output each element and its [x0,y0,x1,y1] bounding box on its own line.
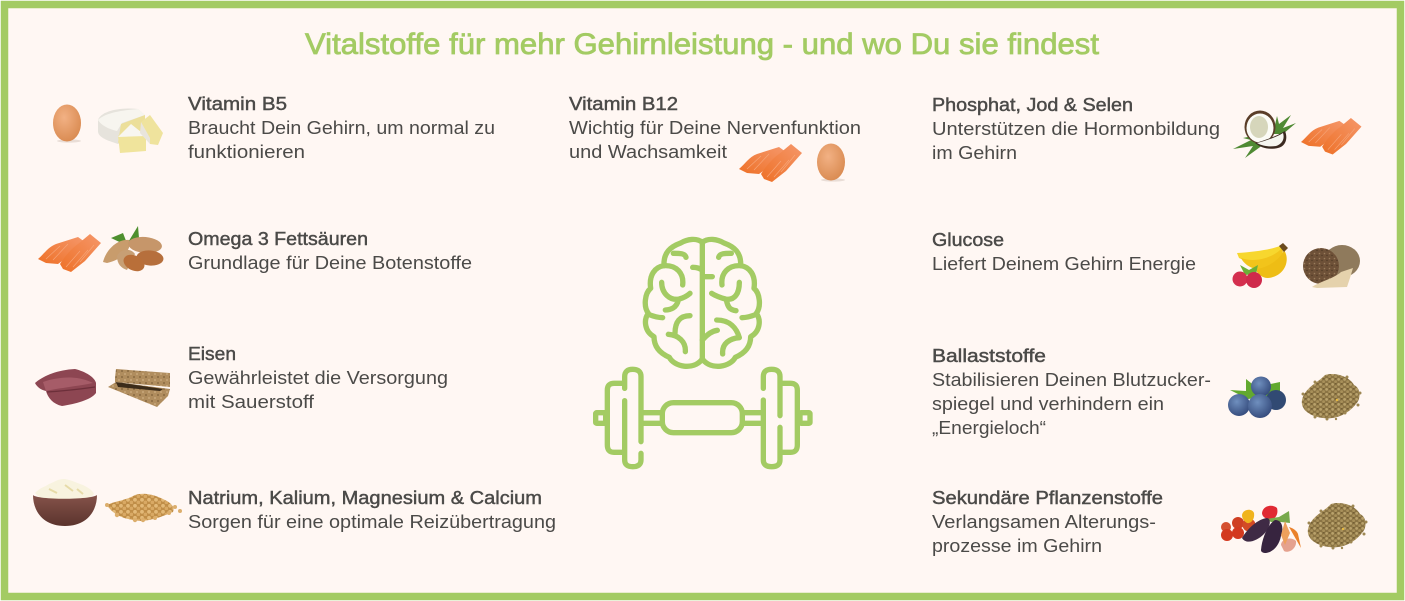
block: Vitamin B12 [569,93,861,182]
text: Glucose: Liefert Deinem Gehirn Energie [932,253,1196,274]
text: Vitamin B12: Wichtig für Deine Nervenfunktion [569,117,861,138]
icon: lentils [1308,503,1368,550]
icon: salmon [38,234,101,272]
text: Phosphat, Jod & Selen: Unterstützen die Hormonbildung [932,118,1220,139]
icon: chickpeas [105,494,182,522]
icon: bread [1303,245,1360,288]
icon: vegetables [1221,506,1301,553]
central icon: brain and dumbbell [596,239,810,467]
text: Phosphat, Jod & Selen [932,94,1220,163]
text: Eisen: Eisen [188,343,236,364]
text: Omega 3 Fettsäuren: Omega 3 Fettsäuren [188,228,368,249]
title: Vitalstoffe für mehr Gehirnleistung - und wo Du sie findest [305,28,1100,61]
text: Sekundäre Pflanzenstoffe [932,487,1163,556]
icon: banana and raspberries [1232,243,1288,288]
text: Vitamin B12: Vitamin B12 [569,93,678,114]
block: Eisen [35,343,448,412]
text: Vitamin B5: Braucht Dein Gehirn, um normal zu [188,117,495,138]
icon: cheese [98,108,163,153]
icon: brain [645,239,759,366]
text: Phosphat, Jod & Selen: Phosphat, Jod & Selen [932,94,1133,115]
text: Sekundäre Pflanzenstoffe: Sekundäre Pflanzenstoffe [932,487,1163,508]
block: Omega 3 Fettsäuren [38,226,472,274]
icon: egg [817,144,845,182]
text: Vitamin B5 [188,93,495,162]
icon: coconut [1233,110,1296,158]
text: Ballaststoffe: Stabilisieren Deinen Blutzucker- [932,369,1211,390]
block: Natrium, Kalium, Magnesium & Calcium [33,479,556,532]
text: Ballaststoffe [932,345,1211,438]
icon: lentils [1302,374,1362,420]
text: Eisen: Gewährleistet die Versorgung [188,367,448,388]
icon: salmon [1301,118,1361,154]
text: Ballaststoffe: „Energieloch“ [932,417,1046,438]
icon: salmon [739,144,802,182]
icon: almonds [103,226,164,274]
text: Phosphat, Jod & Selen: im Gehirn [932,142,1017,163]
icon: blueberries [1228,376,1286,418]
text: Natrium, Kalium, Magnesium & Calcium: Natrium, Kalium, Magnesium & Calcium [188,487,542,508]
block: Glucose [932,229,1360,288]
icon: egg [53,104,81,143]
text: Vitamin B5: Vitamin B5 [188,93,287,114]
icon: crispbread [108,369,170,407]
text: Glucose: Glucose [932,229,1004,250]
text: Vitamin B5: funktionieren [188,141,305,162]
text: Ballaststoffe: Ballaststoffe [932,345,1046,366]
text: Ballaststoffe: spiegel und verhindern ein [932,393,1164,414]
text: Vitamin B12: und Wachsamkeit [569,141,727,162]
text: Glucose [932,229,1196,274]
block: Vitamin B5 [53,93,495,162]
text: Vitamin B12 [569,93,861,162]
block: Ballaststoffe [932,345,1362,438]
text: Natrium, Kalium, Magnesium & Calcium [188,487,556,532]
text: Natrium, Kalium, Magnesium & Calcium: Sorgen für eine optimale Reizübertragung [188,511,556,532]
block: Phosphat, Jod & Selen [932,94,1361,163]
icon: dumbbell [596,369,810,467]
text: Omega 3 Fettsäuren: Grundlage für Deine Botenstoffe [188,252,472,273]
icon: liver [35,369,96,406]
text: Omega 3 Fettsäuren [188,228,472,273]
block: Sekundäre Pflanzenstoffe [932,487,1368,556]
text: Sekundäre Pflanzenstoffe: Verlangsamen Alterungs- [932,511,1156,532]
text: Eisen [188,343,448,412]
text: Sekundäre Pflanzenstoffe: prozesse im Gehirn [932,535,1102,556]
text: Eisen: mit Sauerstoff [188,391,315,412]
icon: cottage cheese bowl [33,479,97,526]
